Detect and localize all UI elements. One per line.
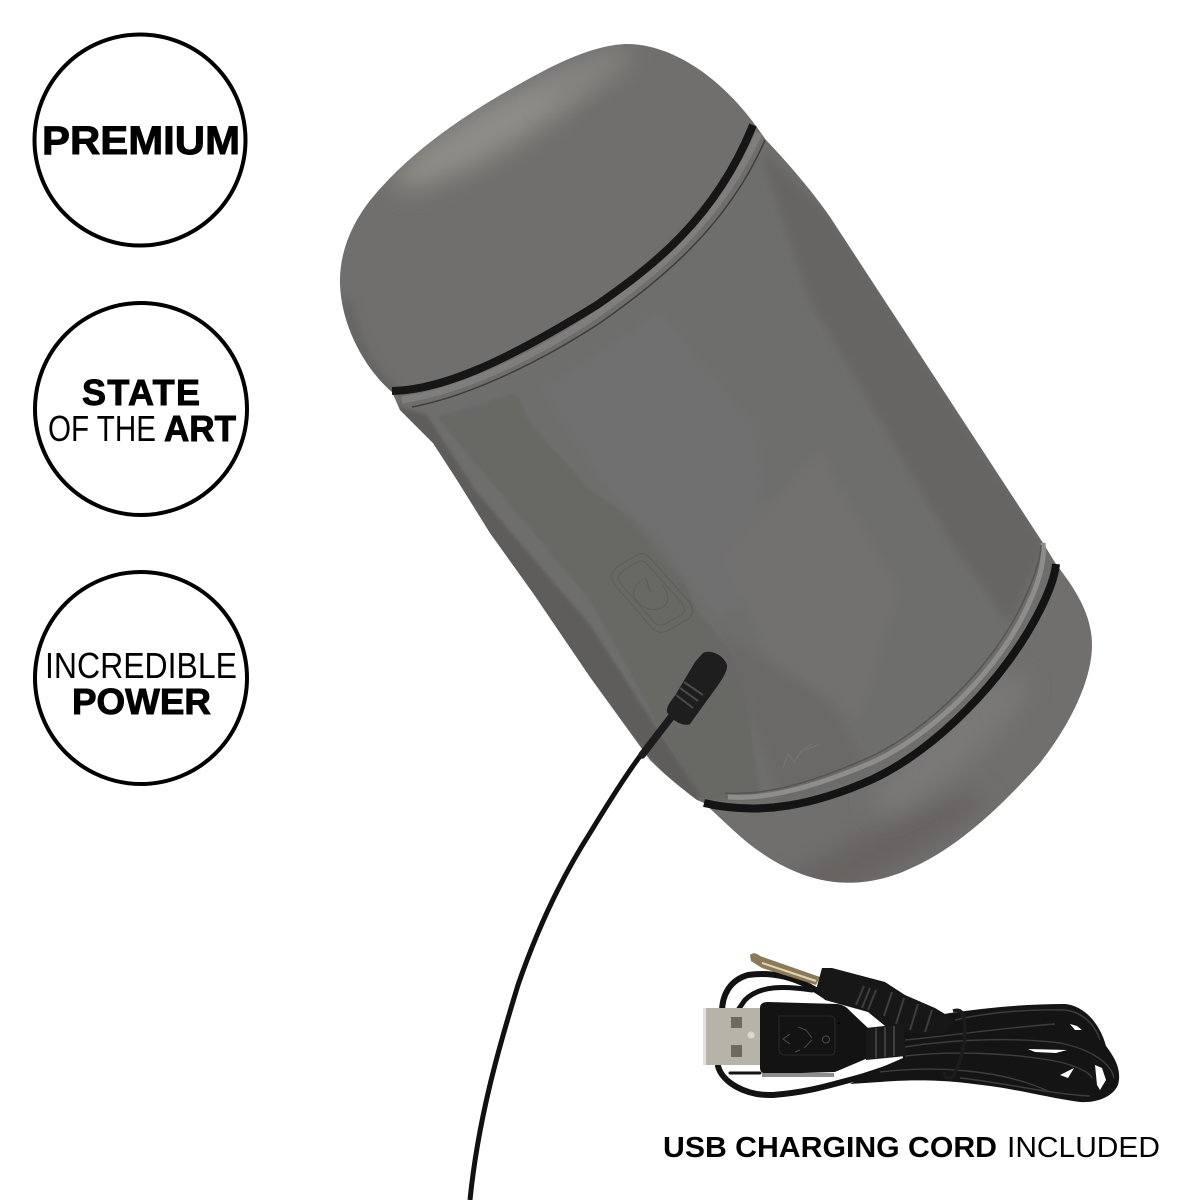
badge: premium xyxy=(34,34,246,246)
medium left facet xyxy=(437,393,760,800)
logo mark embossed xyxy=(783,744,820,768)
cord bundle mass xyxy=(850,1004,1119,1102)
caption xyxy=(663,1132,1160,1164)
cord white gaps xyxy=(1028,1024,1106,1090)
light central facets xyxy=(646,530,674,560)
device top cap xyxy=(340,44,756,392)
caption: USB CHARGING CORD xyxy=(663,1132,997,1164)
cord coils xyxy=(718,974,1057,1095)
attached charging cable xyxy=(470,652,727,1200)
top ring band xyxy=(412,140,765,407)
caption: INCLUDED xyxy=(1007,1132,1160,1164)
bottom ring band xyxy=(728,543,1043,797)
product: grey capsule device xyxy=(340,44,1092,883)
cord highlights xyxy=(880,1010,1114,1096)
device bottom cap xyxy=(710,568,1092,883)
darker right edge facet xyxy=(774,172,1046,612)
badge: state of the art: STATE xyxy=(82,372,200,413)
badge: incredible power: INCREDIBLE xyxy=(45,645,237,686)
badge: premium: PREMIUM xyxy=(42,119,240,163)
badge: state of the art: ART xyxy=(164,408,236,449)
cord tie xyxy=(944,1010,965,1078)
badge: state of the art: OF THE xyxy=(48,408,156,449)
badge: state of the art xyxy=(35,303,247,515)
USB plug housing xyxy=(760,1002,868,1077)
device middle body with facets xyxy=(380,110,1080,820)
badge: incredible power xyxy=(35,572,247,784)
bottom black ring xyxy=(704,564,1056,808)
USB strain relief xyxy=(866,1024,906,1060)
badge: incredible power: POWER xyxy=(72,681,211,722)
jack connector xyxy=(667,652,727,725)
top black ring xyxy=(392,125,753,391)
power button icon xyxy=(612,554,693,632)
dark left edge strip xyxy=(395,405,700,810)
USB metal end xyxy=(703,1008,766,1065)
barrel plug xyxy=(750,953,955,1034)
USB charging cord xyxy=(703,953,1119,1102)
